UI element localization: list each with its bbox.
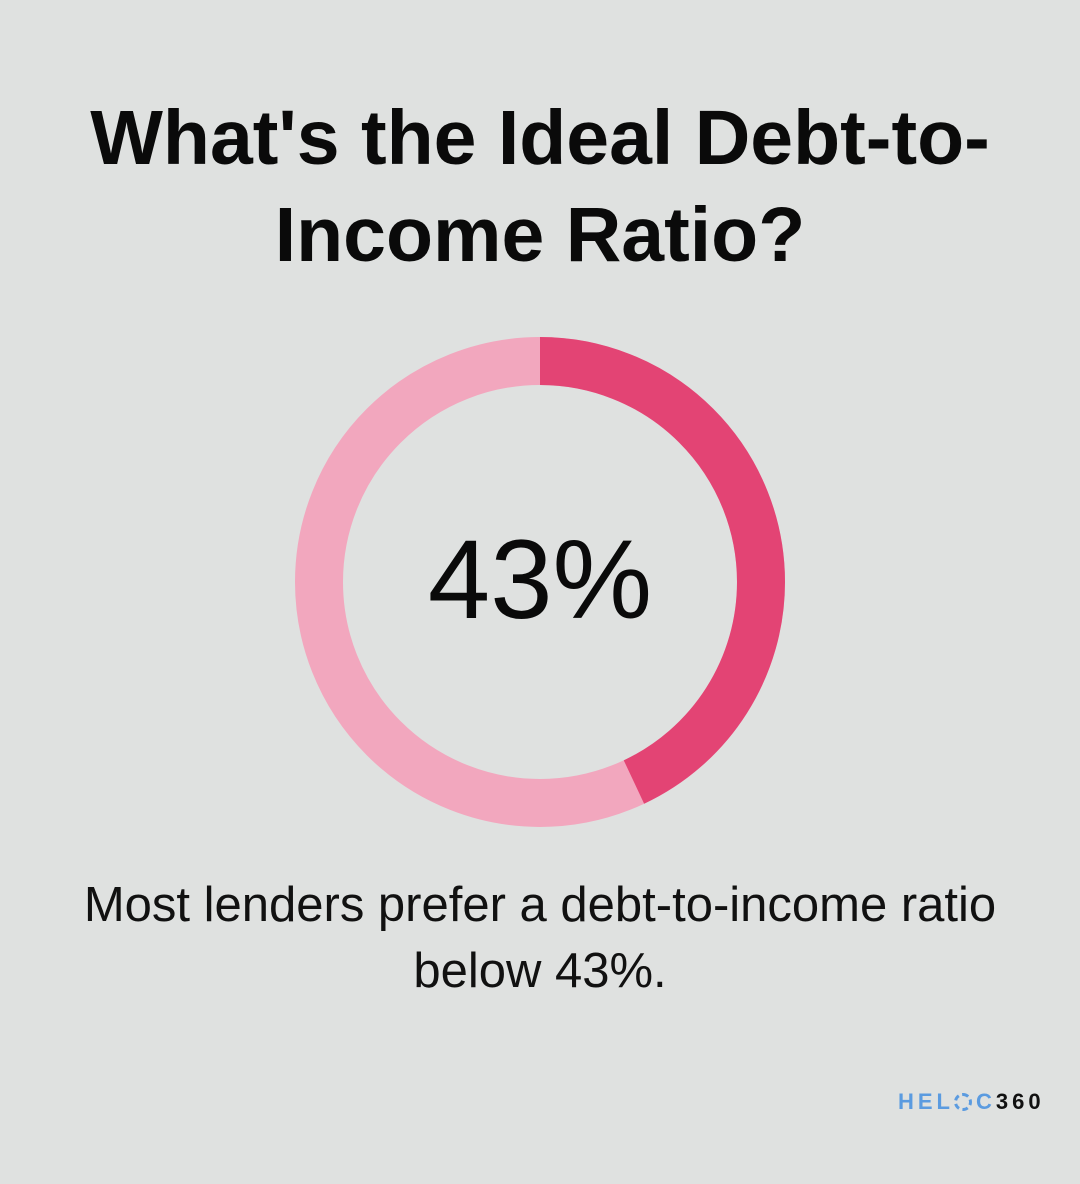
title: Income Ratio?: [275, 192, 805, 278]
logo: HEL C360: [898, 1089, 1045, 1114]
description text: below 43%.: [413, 944, 667, 998]
description text: [84, 878, 996, 998]
big number: 43%: [428, 517, 652, 642]
title: What's the Ideal Debt-to-: [90, 95, 990, 181]
title: [90, 95, 990, 278]
description text: Most lenders prefer a debt-to-income ratio: [84, 878, 996, 932]
